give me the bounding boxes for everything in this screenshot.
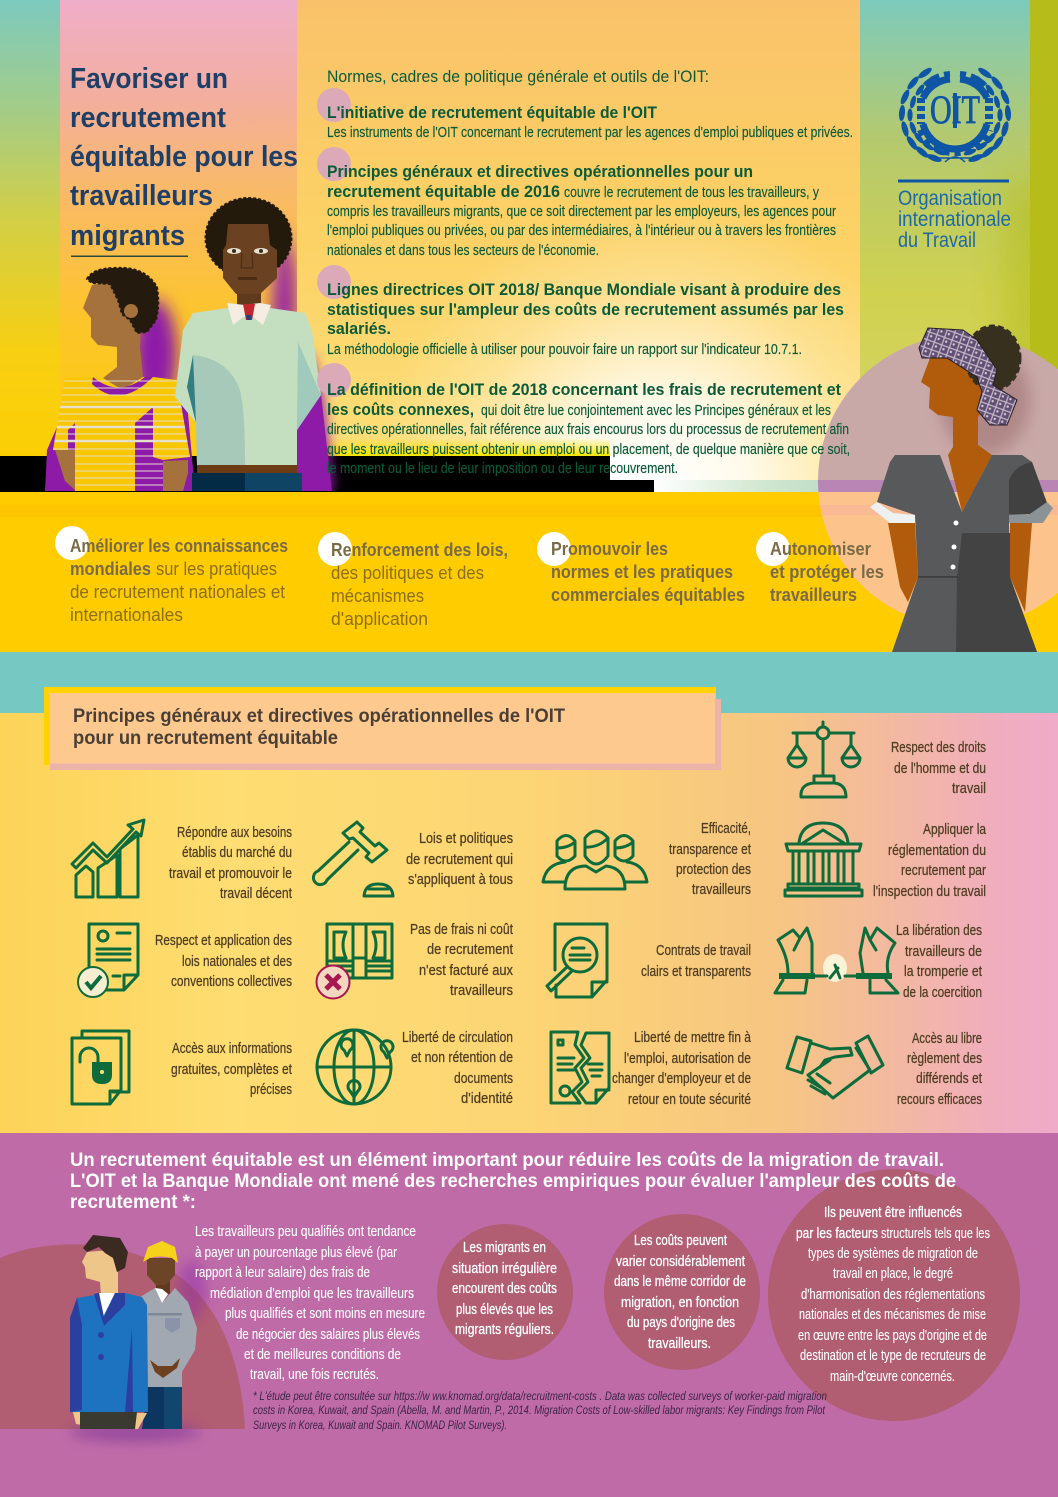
man in blue jacket [70,1235,148,1429]
icon: scales of justice [788,722,860,797]
logo: OIT: du Travail [898,229,976,252]
label: freedom of movement [402,1030,513,1107]
label: laws: s'appliquent à tous [408,872,513,888]
illustration: two workers [70,1235,206,1442]
callout: structural factors: nationales et des mécanismes de mise [799,1307,986,1323]
label: contracts: Contrats de travail [656,943,751,959]
label: liberation: la tromperie et [904,964,982,980]
label: inspection: l'inspection du travail [873,884,986,900]
panel: teal band [0,652,1058,713]
objective 2 [318,532,508,629]
text block: standards list: couvre le recrutement de tous les travailleurs, y [564,184,819,201]
label: national laws: lois nationales et des [182,954,292,970]
text block: standards list: directives opérationnelles, fait référence aux frais encourus lors du processus de recrutement afin [327,421,849,438]
objective 2: des politiques et des [331,562,484,583]
icon: torn document [551,1032,609,1103]
callout: structural factors: destination et le type de recruteurs de [800,1348,986,1364]
objective 1: internationales [70,604,183,625]
icon: globe with pins [317,1030,393,1104]
title: équitable pour les [70,141,298,173]
label: efficiency: protection des [676,862,751,878]
callout: structural factors: types de systèmes de migration de [808,1246,978,1262]
objective 4: et protéger les [770,561,884,582]
text block: low-skilled workers: plus qualifiés et sont moins en mesure [225,1306,425,1322]
label: efficiency [669,821,751,898]
callout: structural factors: en œuvre entre les pays d'origine et de [798,1328,987,1344]
label: freedom to leave: Liberté de mettre fin à [634,1030,752,1046]
callout: irregular migrants [437,1224,573,1360]
label: liberation: La libération des [896,923,982,939]
text block: low-skilled workers: et de meilleures conditions de [244,1347,401,1363]
label: dispute resolution: différends et [916,1071,982,1087]
icon: three workers [543,831,647,889]
objective 4: travailleurs [770,584,857,605]
callout: corridor costs: varier considérablement [616,1254,745,1270]
text block: footnote: * L'étude peut être consultée sur https://w ww.knomad.org/data/recruitment-costs . Data was collected surveys of worker-paid migration [253,1389,827,1403]
callout: irregular migrants: migrants réguliers. [455,1322,554,1338]
label: no fees [410,922,514,999]
text block: standards list: l'emploi publiques ou privées, ou par des intermédiaires, à l'intérieur ou à travers les frontières [327,222,836,239]
heading: standards intro: Normes, cadres de politique générale et outils de l'OIT: [327,68,709,86]
icon: document with check [78,924,138,997]
text block: standards list: les coûts connexes, [327,401,474,419]
callout: irregular migrants: encourent des coûts [452,1281,557,1297]
callout: structural factors: main-d'œuvre concernés. [830,1369,955,1385]
illustration: woman with circle [800,320,1058,652]
objective 1: Améliorer les connaissances [70,535,288,556]
objective 2: mécanismes [331,585,424,606]
illustration: rose semicircle [0,1244,245,1429]
heading: principles box [44,687,721,770]
label: no fees: travailleurs [450,983,513,999]
text block: low-skilled workers [195,1224,425,1383]
label: national laws [155,933,292,990]
icon: contract with magnifier [547,924,607,997]
label: dispute resolution: Accès au libre [912,1031,982,1047]
panel: principles background [0,713,1058,1133]
title: Favoriser un [70,63,228,95]
objective 3: normes et les pratiques [551,561,733,582]
title: migrants [70,220,185,252]
callout: structural factors: Ils peuvent être influencés [824,1205,962,1221]
title: recrutement [70,102,226,134]
objective 1: mondiales [70,558,151,579]
label: human rights: Respect des droits [891,740,986,756]
text block: standards list: compris les travailleurs migrants, que ce soit directement par les employeurs, les agences pour [327,203,836,220]
callout: structural factors [768,1169,1020,1421]
label: laws [406,831,513,888]
objective 2: Renforcement des lois, [331,539,508,560]
text block: standards list: statistiques sur l'ampleur des coûts de recrutement assumés par les [327,301,844,319]
label: liberation: de la coercition [903,985,982,1001]
label: access to information: précises [250,1082,292,1098]
icon: broken handcuffs [775,928,898,993]
label: efficiency: transparence et [669,842,751,858]
logo: OIT [898,66,1012,252]
icon: institution building [785,823,862,896]
label: inspection: Appliquer la [923,822,987,838]
callout: corridor costs: dans le même corridor de [614,1274,746,1290]
heading: cost of migration [70,1150,956,1213]
text block: low-skilled workers: rapport à leur salaire) des frais de [195,1265,370,1281]
heading: cost of migration: recrutement *: [70,1192,196,1213]
objective 2: d'application [331,608,428,629]
label: dispute resolution [897,1031,982,1108]
text block: standards list: Principes généraux et directives opérationnelles pour un [327,163,753,181]
text block: standards list: qui doit être lue conjointement avec les Principes généraux et les [481,402,831,419]
icon: gavel [313,822,393,896]
icon: growth chart [72,820,144,897]
callout: corridor costs: migration, en fonction [621,1295,739,1311]
label: access to information: Accès aux informations [172,1041,292,1057]
callout: irregular migrants: situation irrégulière [452,1261,557,1277]
label: freedom of movement: et non rétention de [411,1050,513,1066]
label: freedom of movement: Liberté de circulation [402,1030,513,1046]
text block: standards list: Les instruments de l'OIT concernant le recrutement par les agences d'emploi publiques et privées. [327,124,853,141]
text block: standards list: La méthodologie officielle à utiliser pour pouvoir faire un rapport sur l'indicateur 10.7.1. [327,341,802,358]
label: human rights: de l'homme et du [894,761,986,777]
logo: OIT: OIT [930,87,980,132]
text block: low-skilled workers: travail, une fois recrutés. [250,1367,379,1383]
label: no fees: de recrutement [427,942,513,958]
label: contracts: clairs et transparents [641,964,751,980]
label: access to information [171,1041,292,1098]
title: travailleurs [70,180,213,212]
label: laws: Lois et politiques [419,831,513,847]
objective 4 [756,532,884,605]
label: freedom of movement: documents [454,1071,513,1087]
callout: structural factors: travail en place, le degré [833,1266,953,1282]
right man [175,198,321,491]
text block: standards list: le moment ou le lieu de leur imposition ou de leur recouvrement. [327,460,678,477]
text block: low-skilled workers: médiation d'emploi que les travailleurs [210,1286,414,1302]
label: inspection: réglementation du [888,843,986,859]
heading: principles box: pour un recrutement équitable [73,727,338,749]
panel: top background [0,0,1058,520]
label: labour market: Répondre aux besoins [177,825,292,841]
title [70,63,298,257]
label: freedom to leave: retour en toute sécurité [628,1092,751,1108]
label: liberation: travailleurs de [905,944,982,960]
heading: cost of migration: Un recrutement équitable est un élément important pour réduire les coûts de la migration de travail. [70,1150,944,1171]
label: freedom to leave [612,1030,752,1108]
worker in grey [140,1241,197,1429]
label: liberation [896,923,982,1001]
text block: footnote: Surveys in Korea, Kuwait and Spain. KNOMAD Pilot Surveys). [253,1418,507,1432]
logo: OIT: internationale [898,208,1011,231]
text block: standards list [317,88,853,477]
callout: corridor costs: du pays d'origine des [627,1315,735,1331]
callout: corridor costs: travailleurs. [648,1336,711,1352]
text block: standards list: salariés. [327,320,391,338]
panel: yellow objectives band [0,492,1058,652]
label: labour market: travail décent [220,886,292,902]
label: human rights [891,740,986,797]
pink circle [818,335,1058,614]
text block: standards list: recrutement équitable de 2016 [327,183,560,201]
label: laws: de recrutement qui [406,852,513,868]
label: labour market: établis du marché du [182,845,292,861]
text block: footnote: costs in Korea, Kuwait, and Spain (Abella, M. and Martin, P., 2014. Migration Costs of Low-skilled labor migrants: Key Findings from Pilot [253,1403,826,1417]
text block: standards list: Lignes directrices OIT 2018/ Banque Mondiale visant à produire des [327,281,841,299]
label: efficiency: Efficacité, [701,821,751,837]
label: access to information: gratuites, complètes et [171,1062,292,1078]
callout: structural factors: par les facteurs [796,1226,878,1242]
callout: irregular migrants: Les migrants en [463,1240,546,1256]
left man [50,268,195,491]
label: freedom to leave: l'emploi, autorisation de [624,1051,751,1067]
text block: standards list: La définition de l'OIT de 2018 concernant les frais de recrutement et [327,381,841,399]
objective 3 [537,532,745,605]
icon: handshake [787,1036,883,1098]
label: labour market [169,825,292,902]
text block: standards list: que les travailleurs puissent obtenir un emploi ou un placement, de quelque manière que ce soit, [327,441,850,458]
callout: corridor costs [604,1214,760,1370]
logo: OIT: Organisation [898,187,1002,210]
callout: irregular migrants: plus élevés que les [456,1302,553,1318]
text block: standards list: nationales et dans tous les secteurs de l'économie. [327,242,599,259]
label: no fees: Pas de frais ni coût [410,922,513,938]
label: inspection: recrutement par [901,863,986,879]
illustration: two men [45,198,334,491]
icon: banknotes with cross [316,924,392,998]
heading: cost of migration: L'OIT et la Banque Mondiale ont mené des recherches empiriques pour évaluer l'ampleur des coûts de [70,1171,956,1192]
text block: low-skilled workers: à payer un pourcentage plus élevé (par [195,1245,397,1261]
objective 4: Autonomiser [770,538,871,559]
callout: structural factors: d'harmonisation des réglementations [801,1287,985,1303]
callout: corridor costs: Les coûts peuvent [634,1233,727,1249]
panel: pink bottom background [0,1133,1058,1497]
label: contracts [641,943,751,980]
callout: structural factors: structurels tels que les [881,1226,990,1242]
label: inspection [873,822,987,900]
purple glow [45,225,334,491]
label: dispute resolution: recours efficaces [897,1092,982,1108]
heading: principles box: Principes généraux et directives opérationnelles de l'OIT [73,705,565,727]
objective 3: commerciales équitables [551,584,745,605]
label: efficiency: travailleurs [692,882,751,898]
icon: open padlock on document [72,1031,129,1104]
text block: low-skilled workers: de négocier des salaires plus élevés [236,1327,420,1343]
label: dispute resolution: règlement des [907,1051,982,1067]
objective 1: de recrutement nationales et [70,581,285,602]
text block: low-skilled workers: Les travailleurs peu qualifiés ont tendance [195,1224,416,1240]
text block: footnote [253,1389,827,1432]
label: freedom to leave: changer d'employeur et de [612,1071,751,1087]
label: no fees: n'est facturé aux [419,963,514,979]
label: labour market: travail et promouvoir le [169,866,292,882]
label: freedom of movement: d'identité [461,1091,513,1107]
objective 1 [55,526,288,625]
objective 1: sur les pratiques [156,558,277,579]
label: human rights: travail [952,781,986,797]
label: national laws: conventions collectives [171,974,292,990]
objective 3: Promouvoir les [551,538,668,559]
label: national laws: Respect et application des [155,933,292,949]
text block: standards list: L'initiative de recrutement équitable de l'OIT [327,104,657,122]
panel: objectives [55,526,884,629]
